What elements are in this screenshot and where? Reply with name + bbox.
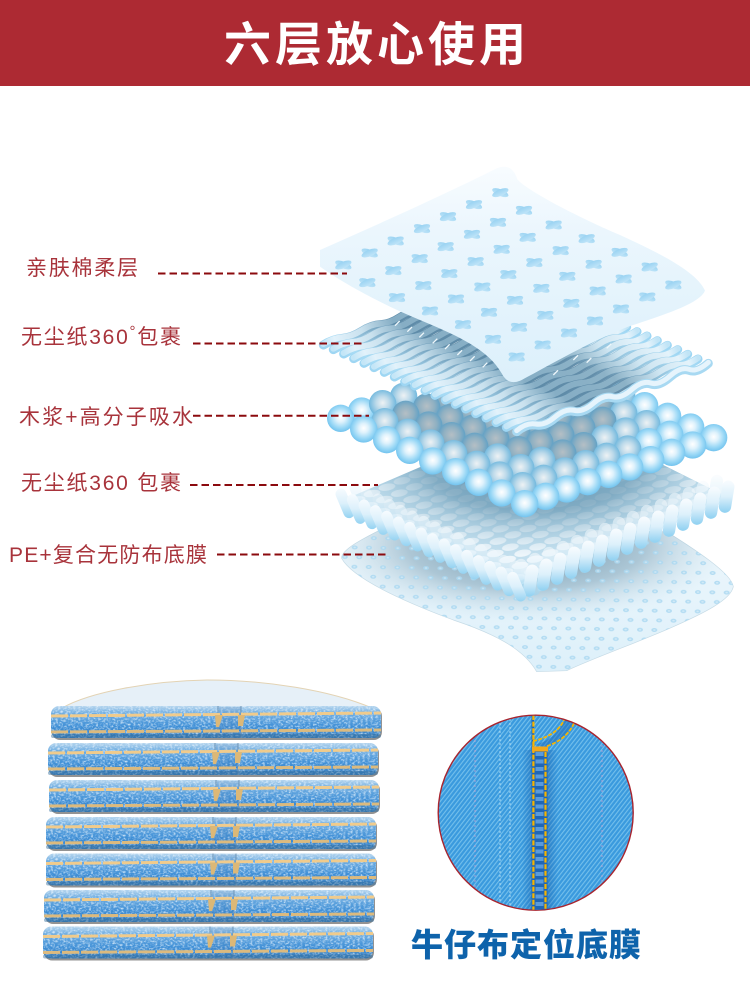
diaper bars <box>43 706 382 960</box>
denim fabric circle <box>438 715 633 911</box>
perforation crosses <box>334 186 683 363</box>
layer 4: looped dust-free paper wrap <box>341 410 728 596</box>
label: PE and composite non-woven backsheet: PE+复合无防布底膜 <box>9 544 207 567</box>
title: 六层放心使用 <box>224 18 526 71</box>
label: dust-free paper 360 wrap, upper: ° <box>130 323 136 340</box>
layer 5: perforated PE bottom film <box>341 530 734 672</box>
header banner <box>0 0 750 86</box>
label: dust-free paper 360 wrap, upper: 无尘纸360 <box>21 326 128 349</box>
stack of denim-pattern diapers <box>43 680 382 960</box>
top diaper dome <box>62 680 372 708</box>
label: dust-free paper 360 wrap, lower: 无尘纸360 包裹 <box>21 472 181 495</box>
label: skin-friendly soft layer: 亲肤棉柔层 <box>26 257 138 280</box>
layer 3: wood pulp and polymer spheres <box>327 371 727 517</box>
layer 1: soft skin-friendly top sheet <box>320 167 705 382</box>
denim backsheet caption: 牛仔布定位底膜 <box>411 927 641 963</box>
layer 2: corrugated dust-free paper wrap <box>323 276 708 432</box>
label: wood pulp and polymer absorbent: 木浆+高分子吸水 <box>19 406 193 429</box>
label: dust-free paper 360 wrap, upper <box>21 323 362 349</box>
label: dust-free paper 360 wrap, upper: 包裹 <box>137 326 181 349</box>
